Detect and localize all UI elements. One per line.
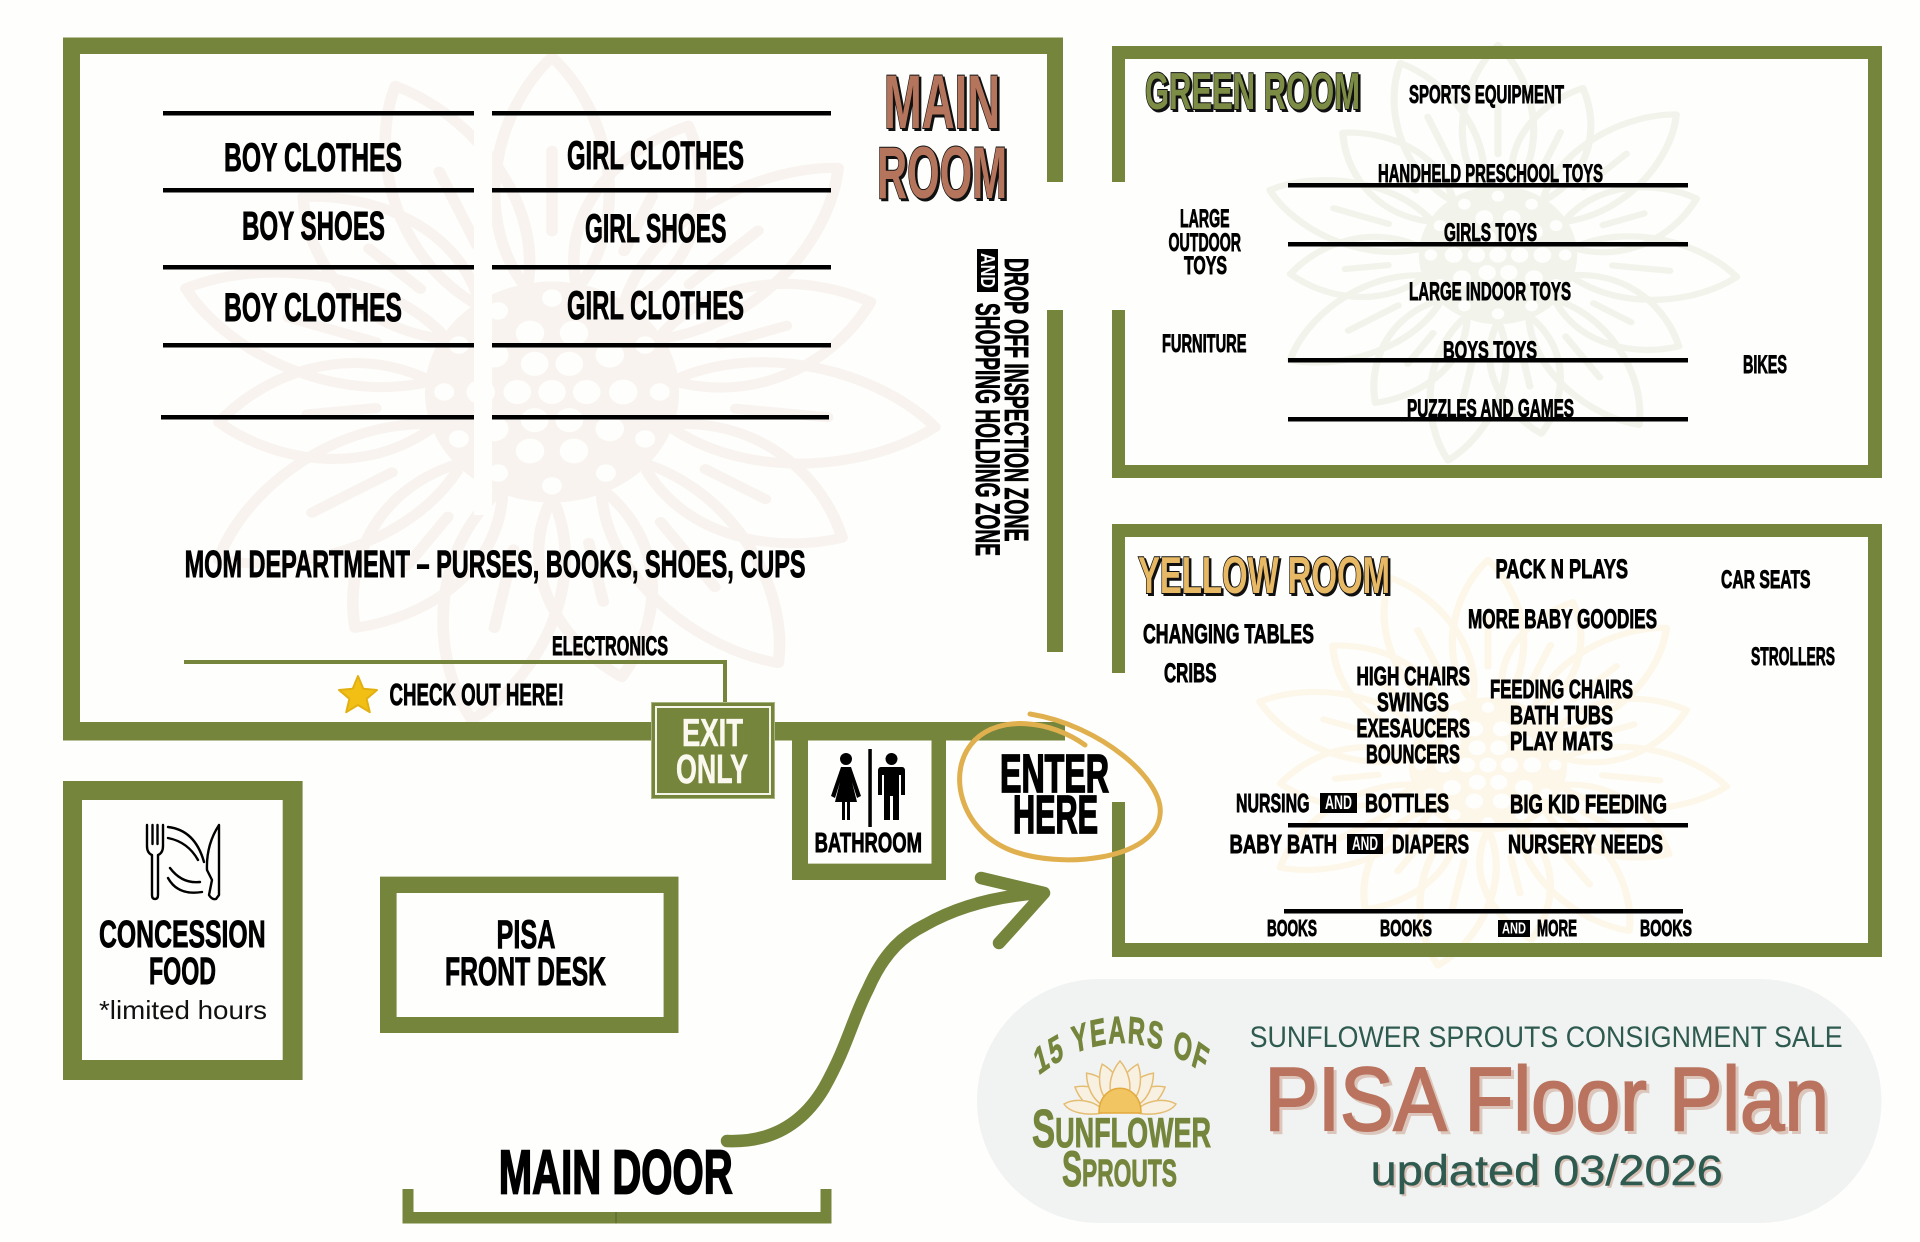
label: limited hours: *limited hours bbox=[99, 995, 267, 1025]
label: bathroom: BATHROOM bbox=[815, 827, 922, 858]
panel: green room bbox=[1112, 45, 1882, 478]
label: large indoor toys: LARGE INDOOR TOYS bbox=[1409, 278, 1571, 306]
label: girl clothes lower: GIRL CLOTHES bbox=[567, 284, 744, 328]
watermark: sunflower in main room bbox=[168, 57, 941, 730]
exit only sign bbox=[652, 702, 774, 798]
label: large outdoor toys: TOYS bbox=[1184, 252, 1227, 280]
label: books and more row: AND bbox=[1502, 920, 1526, 938]
label: enter here: ENTER bbox=[1000, 744, 1109, 804]
label: cribs: CRIBS bbox=[1164, 658, 1216, 688]
label: feeding chairs list bbox=[1490, 674, 1633, 756]
label: large outdoor toys: OUTDOOR bbox=[1168, 229, 1241, 257]
aisle gap between clothing columns bbox=[474, 113, 492, 515]
label: nursing and bottles: NURSING bbox=[1236, 788, 1310, 818]
panel: bathroom bbox=[792, 740, 946, 880]
title: main room: ROOM bbox=[877, 133, 1007, 214]
watermark: sunflower in yellow room bbox=[1249, 560, 1730, 972]
check out counter line bbox=[184, 662, 725, 705]
label: high chairs list: BOUNCERS bbox=[1366, 739, 1460, 769]
label: check out here: CHECK OUT HERE! bbox=[390, 677, 564, 712]
label: pisa front desk bbox=[445, 913, 606, 994]
panel: yellow room bbox=[1112, 524, 1882, 972]
label: sports equipment: SPORTS EQUIPMENT bbox=[1409, 81, 1564, 109]
label: enter here bbox=[1000, 744, 1109, 845]
label: baby bath and diapers: DIAPERS bbox=[1392, 829, 1469, 859]
title: main room: MAIN bbox=[884, 60, 1000, 145]
label: baby bath and diapers: BABY BATH bbox=[1230, 829, 1337, 859]
label: books and more row bbox=[1267, 915, 1692, 941]
title: green room: GREEN ROOM bbox=[1145, 63, 1360, 121]
label: high chairs list: HIGH CHAIRS bbox=[1356, 661, 1470, 691]
watermark: sunflower in green room bbox=[1259, 45, 1740, 467]
label: enter here: HERE bbox=[1013, 785, 1098, 845]
label: high chairs list bbox=[1356, 661, 1470, 769]
label: books and more row: MORE bbox=[1537, 915, 1577, 941]
logo arc text: 15 years of: 15 YEARS OF bbox=[1034, 1016, 1210, 1075]
label: high chairs list: EXESAUCERS bbox=[1356, 713, 1470, 743]
exit only sign: EXIT bbox=[682, 712, 743, 755]
label: car seats: CAR SEATS bbox=[1721, 566, 1810, 594]
main door bbox=[402, 1138, 832, 1224]
front desk walls bbox=[380, 877, 678, 1033]
label: girls toys: GIRLS TOYS bbox=[1444, 219, 1537, 247]
bathroom walls bbox=[792, 740, 946, 880]
label: bikes: BIKES bbox=[1743, 351, 1787, 379]
label: strollers: STROLLERS bbox=[1751, 643, 1835, 671]
label: electronics: ELECTRONICS bbox=[552, 631, 668, 661]
label: drop off inspection and shopping holding zone: DROP OFF INSPECTION ZONE bbox=[998, 258, 1035, 542]
exit only sign: ONLY bbox=[676, 746, 748, 792]
label: handheld preschool toys: HANDHELD PRESCHOOL TOYS bbox=[1378, 160, 1603, 188]
label: girl clothes top: GIRL CLOTHES bbox=[567, 134, 744, 178]
label: mom department: MOM DEPARTMENT – PURSES, BOOKS, SHOES, CUPS bbox=[185, 544, 806, 586]
label: boy clothes lower: BOY CLOTHES bbox=[224, 286, 402, 330]
title: yellow room: YELLOW ROOM bbox=[1138, 547, 1390, 605]
green room walls bbox=[1112, 46, 1882, 478]
label: books and more row: BOOKS bbox=[1640, 915, 1692, 941]
label: baby bath and diapers: AND bbox=[1352, 834, 1378, 855]
title: main room bbox=[877, 60, 1007, 214]
logo: sunflower sprouts bbox=[1032, 1016, 1211, 1197]
clothing rack lines bbox=[161, 111, 831, 420]
label: large outdoor toys: LARGE bbox=[1180, 205, 1230, 233]
banner background bbox=[977, 979, 1882, 1223]
label: drop off inspection and shopping holding zone bbox=[968, 249, 1035, 556]
logo wordmark: sunflower: SUNFLOWER bbox=[1032, 1099, 1211, 1159]
label: puzzles and games: PUZZLES AND GAMES bbox=[1407, 395, 1574, 423]
label: concession food: CONCESSION bbox=[99, 914, 266, 956]
label: nursing and bottles bbox=[1236, 788, 1449, 818]
label: girl shoes: GIRL SHOES bbox=[585, 207, 726, 251]
logo wordmark: sprouts: SPROUTS bbox=[1062, 1141, 1177, 1197]
label: pisa front desk: FRONT DESK bbox=[445, 950, 606, 994]
date: updated 03/2026: updated 03/2026 bbox=[1371, 1147, 1723, 1195]
label: books and more row: BOOKS bbox=[1267, 915, 1317, 941]
shelf lines bbox=[1288, 183, 1688, 422]
label: concession food: FOOD bbox=[149, 951, 216, 993]
hand-drawn circle around enter here bbox=[960, 714, 1160, 860]
icon: restroom figures bbox=[831, 749, 905, 827]
label: pack n plays: PACK N PLAYS bbox=[1496, 554, 1628, 584]
shelf line nursing bbox=[1288, 823, 1688, 828]
concession walls bbox=[63, 781, 303, 1080]
label: big kid feeding: BIG KID FEEDING bbox=[1510, 789, 1667, 819]
label: books and more row: BOOKS bbox=[1380, 915, 1432, 941]
panel: concession food bbox=[63, 781, 303, 1080]
icon: star bbox=[339, 676, 377, 712]
label: high chairs list: SWINGS bbox=[1377, 687, 1449, 717]
label: nursing and bottles: AND bbox=[1325, 793, 1352, 814]
shelf line books bbox=[1284, 909, 1683, 914]
label: changing tables: CHANGING TABLES bbox=[1143, 619, 1314, 649]
label: pisa front desk: PISA bbox=[496, 913, 556, 957]
label: boy clothes top: BOY CLOTHES bbox=[224, 136, 402, 180]
label: large outdoor toys bbox=[1168, 205, 1241, 280]
label: main door: MAIN DOOR bbox=[499, 1138, 733, 1208]
label: drop off inspection and shopping holding zone: SHOPPING HOLDING ZONE bbox=[968, 303, 1006, 556]
label: boys toys: BOYS TOYS bbox=[1443, 337, 1537, 365]
label: nursing and bottles: BOTTLES bbox=[1365, 788, 1449, 818]
main room walls bbox=[63, 38, 1065, 740]
arrow: main door to enter here bbox=[727, 878, 1044, 1141]
panel: main room bbox=[63, 38, 1065, 740]
icon: small sunflower bbox=[1064, 1061, 1176, 1115]
label: nursery needs: NURSERY NEEDS bbox=[1508, 829, 1663, 859]
label: feeding chairs list: PLAY MATS bbox=[1510, 726, 1613, 756]
label: furniture: FURNITURE bbox=[1162, 330, 1246, 358]
label: boy shoes: BOY SHOES bbox=[242, 204, 385, 248]
label: concession food bbox=[99, 914, 266, 993]
label: baby bath and diapers bbox=[1230, 829, 1469, 859]
yellow room walls bbox=[1112, 524, 1882, 957]
subtitle: sunflower sprouts consignment sale: SUNFLOWER SPROUTS CONSIGNMENT SALE bbox=[1250, 1021, 1843, 1054]
icon: plate with fork and knife bbox=[147, 825, 219, 899]
panel: pisa front desk bbox=[380, 877, 678, 1033]
label: feeding chairs list: FEEDING CHAIRS bbox=[1490, 674, 1633, 704]
label: drop off inspection and shopping holding zone: AND bbox=[976, 253, 998, 288]
door threshold bbox=[402, 1189, 832, 1224]
label: feeding chairs list: BATH TUBS bbox=[1510, 700, 1613, 730]
panel: title banner bbox=[977, 979, 1882, 1223]
title: pisa floor plan: PISA Floor Plan bbox=[1264, 1050, 1829, 1150]
label: more baby goodies: MORE BABY GOODIES bbox=[1468, 604, 1657, 634]
